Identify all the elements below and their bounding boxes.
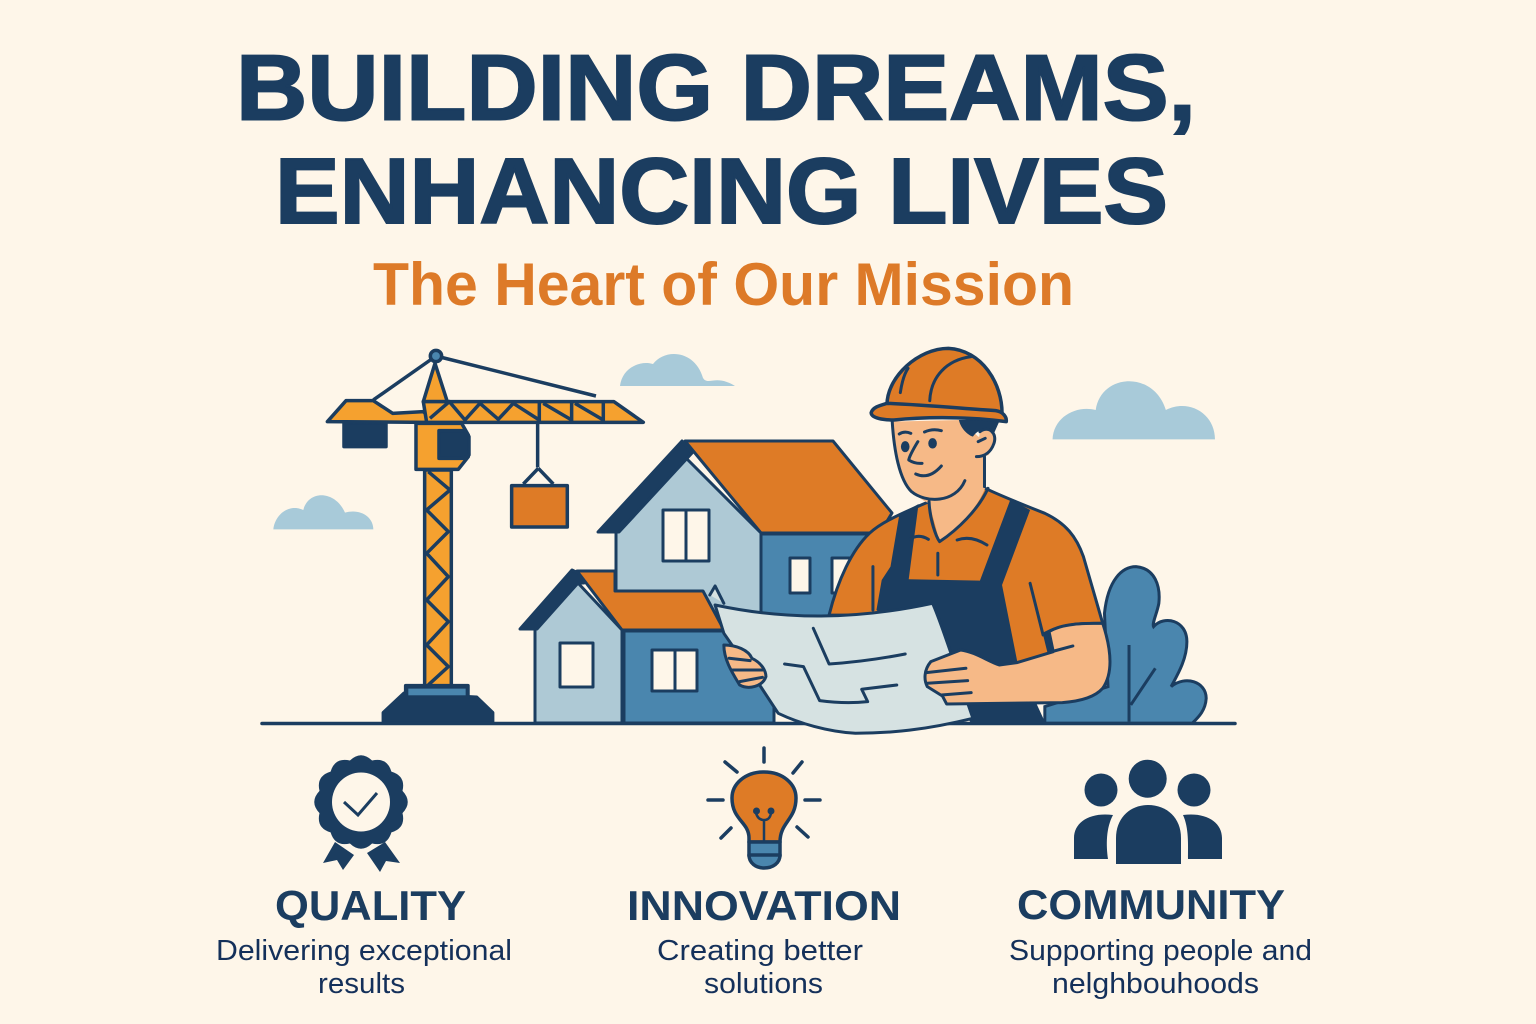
cloud: left xyxy=(273,495,373,529)
title: ENHANCING LIVES xyxy=(275,139,1168,243)
heading: innovation: INNOVATION xyxy=(627,882,901,929)
description: innovation: solutions xyxy=(704,968,823,1000)
house: lower xyxy=(520,570,774,723)
description: community: Supporting people and xyxy=(1009,935,1312,967)
description: innovation: Creating better xyxy=(657,935,863,967)
value: quality xyxy=(216,755,512,1000)
ground line xyxy=(262,722,1235,725)
heading: community: COMMUNITY xyxy=(1017,881,1285,928)
icon: three people xyxy=(1074,760,1222,864)
bush xyxy=(1045,567,1206,723)
value: innovation xyxy=(627,748,901,1000)
description: community: nelghbouhoods xyxy=(1052,968,1259,1000)
description: community xyxy=(1009,935,1312,1000)
description: innovation xyxy=(657,935,863,1000)
house: upper xyxy=(598,441,892,634)
blueprint map xyxy=(710,586,973,733)
icon: light bulb xyxy=(708,748,820,868)
icon: rosette badge xyxy=(314,755,408,872)
heading: quality: QUALITY xyxy=(275,882,466,929)
description: quality: Delivering exceptional xyxy=(216,935,512,967)
illustration: construction scene xyxy=(262,348,1235,733)
title: BUILDING DREAMS, xyxy=(236,36,1196,140)
description: quality: results xyxy=(318,968,405,1000)
worker xyxy=(710,348,1110,733)
description: quality xyxy=(216,935,512,1000)
cloud: top xyxy=(620,354,735,386)
arm and hand: right xyxy=(925,623,1110,704)
subtitle: The Heart of Our Mission xyxy=(373,251,1074,318)
hand: left xyxy=(724,645,766,687)
cloud: right xyxy=(1053,381,1215,439)
value: community xyxy=(1009,760,1312,1000)
title xyxy=(236,36,1196,243)
crane xyxy=(327,350,643,723)
